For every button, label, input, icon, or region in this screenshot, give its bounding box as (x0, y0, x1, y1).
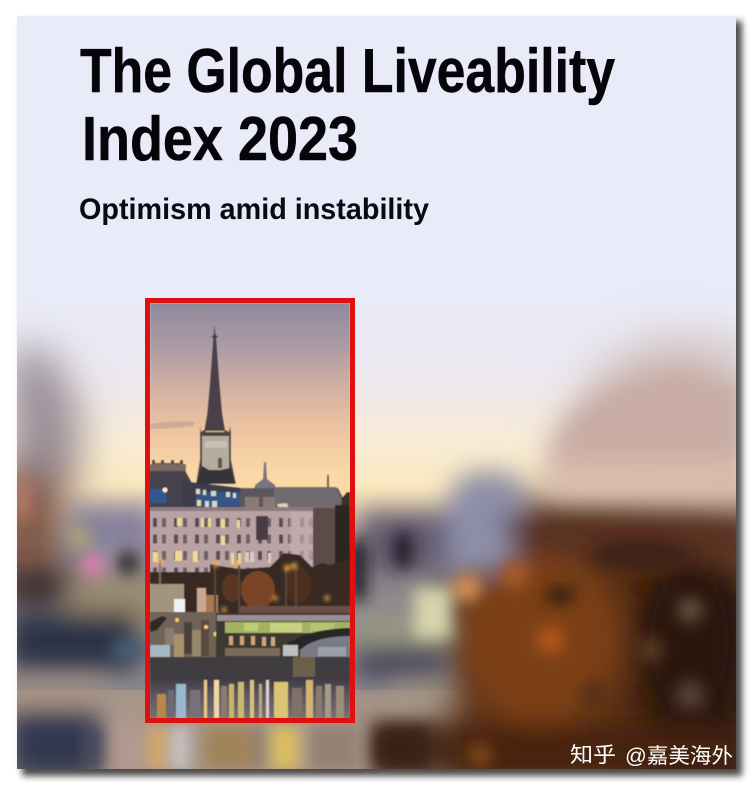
watermark: @嘉美海外 (625, 745, 733, 768)
roofs (150, 459, 350, 510)
quay wall (150, 657, 350, 677)
title: The Global Liveability (80, 37, 615, 106)
trees and street lights (150, 553, 350, 614)
watermark (570, 744, 732, 766)
blurred photo background (17, 312, 736, 769)
subtitle: Optimism amid instability (79, 193, 429, 226)
sky (150, 303, 350, 518)
cathedral spire and tower (196, 325, 236, 484)
title: Index 2023 (82, 105, 358, 174)
embankment (150, 612, 220, 658)
title (80, 46, 615, 162)
red frame (148, 300, 352, 720)
bridge (216, 613, 350, 659)
facade (150, 504, 350, 573)
water reflections (150, 677, 350, 718)
watermark: 知乎 (570, 739, 616, 769)
framed city photo (147, 300, 352, 720)
